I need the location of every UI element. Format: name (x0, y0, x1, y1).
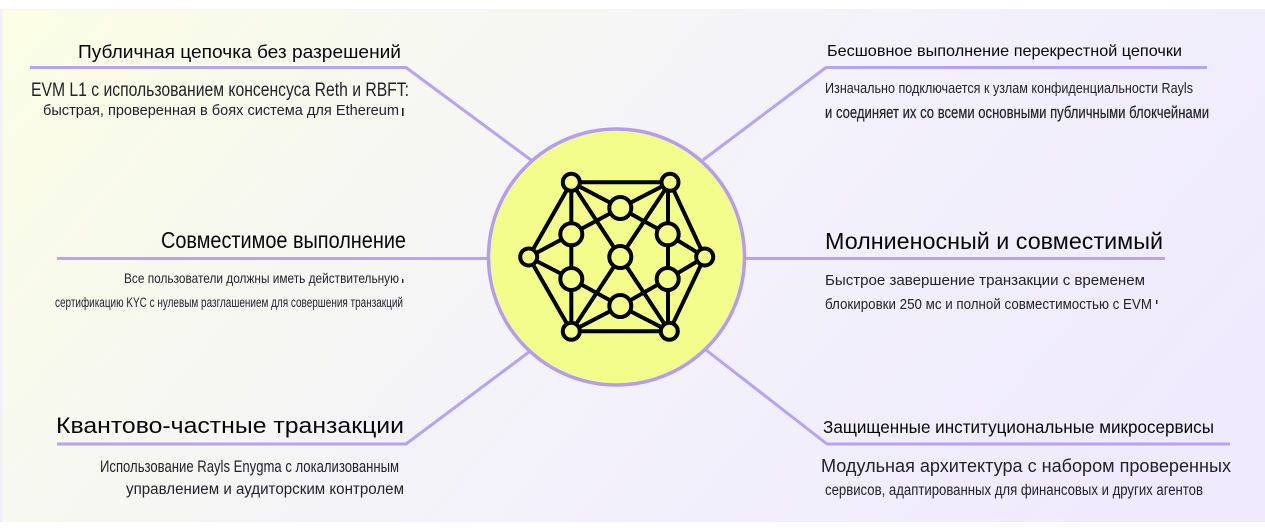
connector lines (30, 68, 1230, 444)
block: lightning fast and compatible (825, 228, 1163, 313)
block: seamless cross-chain execution: Изначально подключается к узлам конфиденциальности Rayls (825, 81, 1193, 97)
block: secure institutional microservices (821, 417, 1232, 499)
block: lightning fast and compatible: блокировки 250 мс и полной совместимостью с EVM (825, 296, 1152, 313)
block: compliant execution (55, 227, 406, 310)
block: seamless cross-chain execution (825, 43, 1209, 122)
block: public permissionless chain: EVM L1 с использованием консенсуса Reth и RBFT: (31, 80, 409, 101)
block: secure institutional microservices: Модульная архитектура с набором проверенных (821, 455, 1232, 476)
block: seamless cross-chain execution: Бесшовное выполнение перекрестной цепочки (827, 43, 1182, 60)
block: public permissionless chain: быстрая, проверенная в боях система для Ethereum (43, 102, 399, 119)
block: quantum private transactions: Использование Rayls Enygma с локализованным (100, 457, 399, 476)
block: public permissionless chain (31, 41, 409, 119)
block: compliant execution: Все пользователи должны иметь действительную (124, 270, 399, 286)
block: compliant execution: сертификацию KYC с нулевым разглашением для совершения транзакций (55, 295, 403, 310)
block: quantum private transactions: Квантово-частные транзакции (56, 413, 404, 438)
block: lightning fast and compatible: Молниеносный и совместимый (825, 228, 1163, 254)
block: secure institutional microservices: сервисов, адаптированных для финансовых и других агентов (825, 482, 1203, 499)
icon: network hexagon (520, 174, 713, 340)
block: secure institutional microservices: Защищенные институциональные микросервисы (823, 417, 1214, 437)
block: lightning fast and compatible: Быстрое завершение транзакции с временем (825, 272, 1145, 289)
block: quantum private transactions: управлением и аудиторским контролем (126, 481, 404, 498)
block: compliant execution: Совместимое выполнение (161, 227, 406, 253)
central circle (488, 129, 744, 385)
block: public permissionless chain: Публичная цепочка без разрешений (78, 41, 401, 62)
block: quantum private transactions (56, 413, 404, 498)
